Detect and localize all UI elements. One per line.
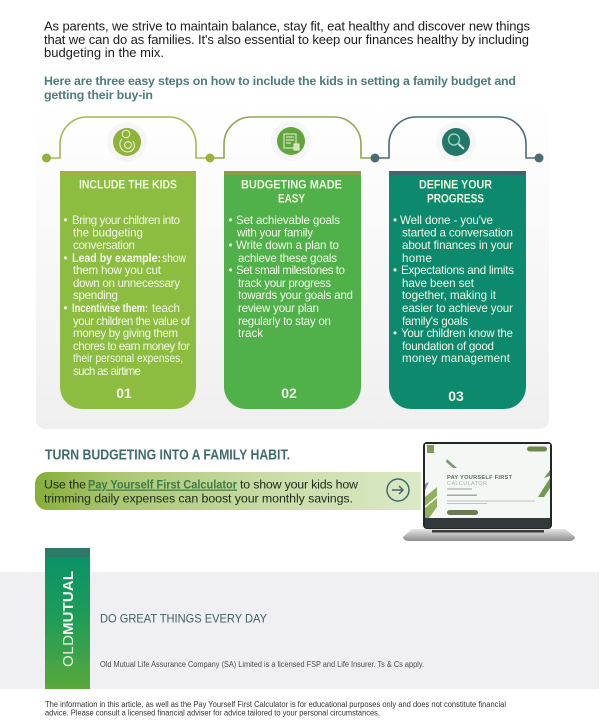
bullet list: Well done - you've — [400, 214, 493, 227]
step 1 connector — [42, 117, 210, 162]
bullet list: • — [228, 214, 233, 227]
bullet list: Set small milestones to — [236, 264, 345, 277]
bullet list: • — [64, 214, 68, 227]
bullet list: Expectations and limits — [401, 264, 514, 277]
bullet list — [64, 214, 191, 378]
logo text: OLD — [60, 635, 77, 667]
laptop screen — [423, 442, 552, 529]
bullet list: review your plan — [238, 302, 319, 315]
bullet list: such as airtime — [73, 365, 141, 378]
heading — [419, 178, 492, 206]
panel: define your progress — [389, 171, 526, 409]
laptop screen: CALCULATOR — [447, 481, 487, 487]
icon: parent and child — [107, 122, 147, 162]
step number: 01 — [116, 385, 132, 401]
bullet list: easier to achieve your — [402, 302, 513, 315]
bullet list: chores to earn money for — [73, 340, 190, 353]
step 3 connector — [370, 117, 544, 162]
laptop mockup — [403, 442, 575, 541]
bullet list: Bring your children into — [72, 214, 180, 227]
subheading: Here are three easy steps on how to include the kids in setting a family budget and — [44, 74, 516, 88]
bullet list: • — [393, 264, 397, 277]
intro paragraph: budgeting in the mix. — [44, 45, 164, 60]
laptop base — [403, 529, 575, 541]
banner text: trimming daily expenses can boost your monthly savings. — [44, 492, 353, 506]
bullet list: • — [393, 214, 397, 227]
bullet list: the budgeting — [73, 226, 143, 240]
bullet list: track — [238, 327, 263, 340]
subheading: getting their buy-in — [44, 88, 153, 102]
banner text: Use the — [44, 478, 86, 492]
bullet list: money by giving them — [73, 327, 178, 340]
bullet list: regularly to stay on — [238, 315, 331, 328]
bullet list: have been set — [402, 277, 475, 290]
bullet list: • — [64, 302, 68, 315]
disclaimer: The information in this article, as well as the Pay Yourself First Calculator is for educational purposes only and does not constitute financial — [45, 700, 506, 709]
heading: INCLUDE THE KIDS — [79, 178, 177, 192]
bullet list: • — [228, 239, 233, 252]
bullet list: Set achievable goals — [236, 214, 340, 227]
subheading — [44, 74, 516, 102]
heading: BUDGETING MADE — [241, 178, 342, 192]
bullet list: Incentivise them: — [72, 302, 148, 315]
panel: include the kids — [60, 171, 196, 409]
bullet list: their personal expenses, — [73, 352, 183, 365]
logo text: MUTUAL — [60, 571, 77, 635]
bullet list: Write down a plan to — [236, 239, 339, 252]
step number: 02 — [281, 385, 297, 401]
section heading: TURN BUDGETING INTO A FAMILY HABIT. — [45, 448, 290, 464]
logo text — [60, 571, 77, 667]
disclaimer — [45, 700, 506, 718]
bullet list: about finances in your — [402, 239, 513, 252]
bullet list: teach — [152, 302, 180, 315]
bullet list: Your children know the — [401, 327, 513, 340]
panel: budgeting made easy — [224, 171, 361, 409]
bullet list: foundation of good — [402, 340, 494, 353]
intro paragraph: As parents, we strive to maintain balance, stay fit, eat healthy and discover new things — [44, 18, 530, 34]
bullet list: towards your goals and — [238, 289, 353, 302]
panel: steps background — [36, 100, 549, 429]
bullet list: achieve these goals — [238, 252, 337, 265]
bullet list: your children the value of — [73, 315, 191, 328]
bullet list: family's goals — [402, 315, 468, 328]
heading: DEFINE YOUR — [419, 178, 492, 192]
intro paragraph — [44, 18, 530, 60]
heading — [241, 178, 342, 206]
step number: 03 — [448, 388, 464, 404]
bullet list: track your progress — [238, 277, 331, 290]
laptop screen: PAY YOURSELF FIRST — [447, 475, 513, 481]
banner text: to show your kids how — [240, 478, 358, 492]
licence note: Old Mutual Life Assurance Company (SA) Limited is a licensed FSP and Life Insurer. Ts & Cs apply. — [100, 660, 424, 669]
bullet list: down on unnecessary — [73, 277, 180, 290]
bullet list — [393, 214, 514, 365]
icon: magnifying glass — [436, 122, 476, 162]
step 2 connector — [206, 117, 375, 162]
tagline: DO GREAT THINGS EVERY DAY — [100, 612, 267, 626]
bullet list: started a conversation — [402, 226, 513, 240]
bullet list: spending — [73, 289, 118, 302]
bullet list: together, making it — [402, 289, 497, 302]
bullet list: show — [162, 252, 187, 265]
bullet list: • — [393, 327, 397, 340]
banner text: Pay Yourself First Calculator — [88, 478, 237, 492]
heading: PROGRESS — [427, 192, 484, 206]
bullet list: conversation — [73, 239, 135, 252]
bullet list: home — [402, 252, 432, 265]
callout: calculator banner — [35, 472, 421, 510]
icon: arrow — [387, 479, 409, 501]
bullet list: with your family — [236, 226, 313, 240]
heading: EASY — [278, 192, 306, 206]
bullet list: • — [228, 264, 233, 277]
disclaimer: advice. Please consult a licensed financial adviser for advice tailored to your personal circumstances. — [45, 708, 380, 718]
bullet list: Lead by example: — [72, 252, 161, 265]
intro paragraph: that we can do as families. It's also essential to keep our finances healthy by including — [44, 32, 529, 47]
banner text — [44, 478, 358, 506]
bullet list — [228, 214, 353, 340]
bullet list: them how you cut — [73, 264, 162, 277]
logo panel: Old Mutual — [45, 548, 90, 689]
icon: budget document — [271, 121, 311, 161]
footer band — [0, 572, 599, 689]
bullet list: • — [64, 252, 68, 265]
bullet list: money management — [402, 352, 511, 365]
